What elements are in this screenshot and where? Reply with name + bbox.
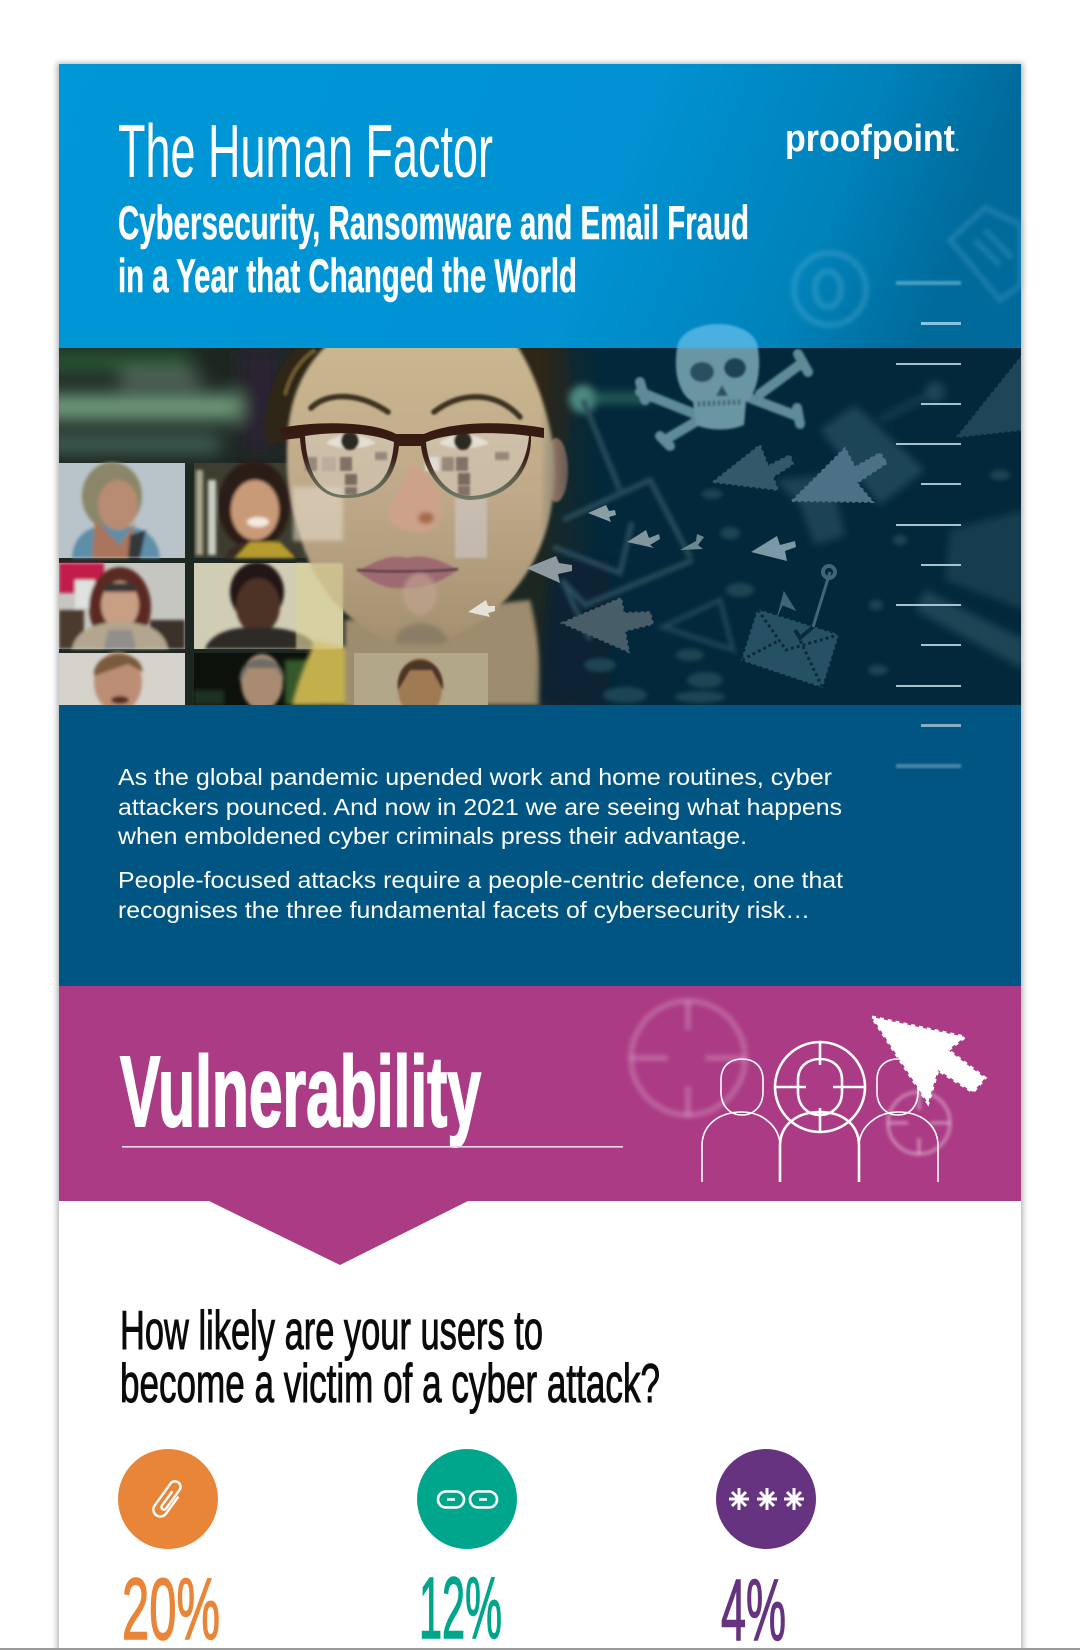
intro text: recognises the three fundamental facets of cybersecurity risk… xyxy=(118,897,810,923)
neck and shoulders xyxy=(292,600,541,705)
lips xyxy=(357,557,458,588)
logo: proofpoint: proofpoint xyxy=(785,118,955,160)
blurred green bands xyxy=(30,350,280,452)
photo montage xyxy=(30,344,1030,718)
intro text xyxy=(117,764,843,923)
question heading xyxy=(120,1299,660,1414)
icon: faded document xyxy=(950,208,1021,300)
video tile: woman with grey hair xyxy=(59,462,185,558)
video tile: smiling woman xyxy=(194,461,306,558)
cursor: medium dim xyxy=(713,445,793,490)
subtitle: in a Year that Changed the World xyxy=(118,249,577,302)
subtitle xyxy=(118,196,749,302)
video tile: man top left xyxy=(59,652,185,712)
blurred envelopes and shapes xyxy=(553,400,733,650)
video tile: woman with glasses xyxy=(59,563,185,649)
lens reflections xyxy=(305,452,509,496)
phishing envelope xyxy=(742,566,838,687)
cursor: large top right xyxy=(957,357,1021,437)
green glow xyxy=(569,385,650,413)
intro text: when emboldened cyber criminals press their advantage. xyxy=(117,823,747,849)
face tile reflections xyxy=(293,487,488,718)
glasses xyxy=(280,423,544,500)
logo: proofpoint: . xyxy=(955,138,959,155)
cursor: small 4 xyxy=(751,536,796,561)
icon: faded at sign xyxy=(794,253,866,325)
vulnerability banner xyxy=(59,986,1021,1265)
background dots xyxy=(584,470,1010,703)
intro panel xyxy=(59,705,1021,986)
icon: blurred target large xyxy=(631,1001,745,1116)
cursor: small 2 xyxy=(627,530,660,548)
face xyxy=(287,344,555,644)
cursor: large lower xyxy=(562,598,653,652)
hair xyxy=(266,344,572,450)
skull and crossbones xyxy=(640,324,808,446)
video tile: woman with dark hair xyxy=(194,562,343,649)
icon: asterisks xyxy=(729,1488,804,1510)
question heading: How likely are your users to xyxy=(120,1299,543,1361)
cursor: large bright xyxy=(792,448,887,502)
stat: link 12% xyxy=(417,1449,517,1650)
heading: Vulnerability: Vulnerability xyxy=(120,1036,481,1148)
stat: attachment 20% xyxy=(118,1449,220,1650)
eyebrows xyxy=(311,396,520,417)
title: The Human Factor xyxy=(118,109,493,193)
reflected man xyxy=(395,573,448,644)
eyes xyxy=(326,432,489,450)
icon: people outlines xyxy=(702,1042,938,1182)
question heading: become a victim of a cyber attack? xyxy=(120,1352,660,1414)
icon: paperclip xyxy=(151,1479,185,1519)
nose xyxy=(389,465,441,532)
icon: chain link xyxy=(438,1492,497,1508)
cursor: small 1 xyxy=(588,505,616,522)
intro text: As the global pandemic upended work and home routines, cyber xyxy=(118,764,832,790)
intro text: attackers pounced. And now in 2021 we are seeing what happens xyxy=(118,794,842,820)
dark cyber overlay xyxy=(540,348,1030,705)
icon: white pixel cursor xyxy=(872,1017,985,1103)
cursor: small 5 xyxy=(526,556,572,583)
ear xyxy=(550,436,570,504)
stat: password 4% xyxy=(716,1449,816,1650)
intro text: People-focused attacks require a people-centric defence, one that xyxy=(118,867,843,893)
ruler ticks xyxy=(896,281,961,768)
cursor: small 3 xyxy=(680,534,704,550)
header panel xyxy=(59,64,1021,348)
cursor: on cheek xyxy=(468,600,495,617)
video tile: man with grey hair xyxy=(194,653,324,710)
icon: blurred target small xyxy=(888,1092,950,1154)
